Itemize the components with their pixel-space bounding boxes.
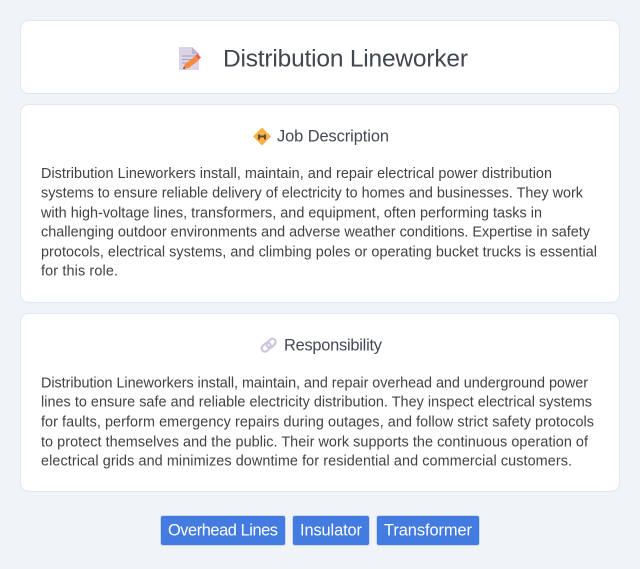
tag: Insulator: Insulator	[300, 522, 363, 540]
text block: job description: challenging outdoor environments and adverse weather conditions. Expertise in safety	[41, 224, 591, 240]
text block: responsibility: electrical grids and minimizes downtime for residential and commercial customers.	[41, 454, 572, 470]
text block: responsibility: lines to ensure safe and reliable electricity distribution. They inspect electrical systems	[41, 394, 592, 410]
title: Distribution Lineworker	[223, 46, 468, 72]
text block: responsibility: Distribution Lineworkers install, maintain, and repair overhead and underground power	[41, 376, 588, 392]
text block: job description: for this role.	[41, 264, 118, 280]
tag: Overhead Lines	[160, 516, 286, 546]
tag: Overhead Lines: Overhead Lines	[168, 522, 278, 540]
tag: Insulator	[292, 516, 370, 546]
tag: Transformer	[376, 516, 480, 546]
icon: chain link	[260, 337, 277, 353]
icon: document with pencil	[179, 47, 201, 70]
text block: job description: with high-voltage lines, transformers, and equipment, often performing tasks in	[40, 206, 542, 222]
panel: job description	[20, 104, 620, 302]
heading: responsibility: Responsibility	[284, 336, 383, 354]
heading: job description: Job Description	[277, 128, 389, 146]
tag: Transformer: Transformer	[384, 522, 473, 540]
text block: job description	[40, 166, 597, 280]
text block: job description: Distribution Lineworkers install, maintain, and repair electrical power distribution	[41, 166, 552, 182]
icon: diamond road sign	[254, 128, 270, 144]
panel: responsibility	[20, 314, 620, 492]
text block: responsibility: for faults, perform emergency repairs during outages, and follow strict safety protocols	[41, 414, 594, 430]
text block: job description: systems to ensure reliable delivery of electricity to homes and businesses. They work	[41, 186, 584, 202]
panel: title header	[20, 20, 620, 94]
text block: responsibility: to protect themselves and the public. Their work supports the continuous operation of	[41, 434, 589, 450]
text block: job description: protocols, electrical systems, and climbing poles or operating bucket trucks is essential	[41, 244, 597, 260]
text block: responsibility	[41, 376, 594, 470]
